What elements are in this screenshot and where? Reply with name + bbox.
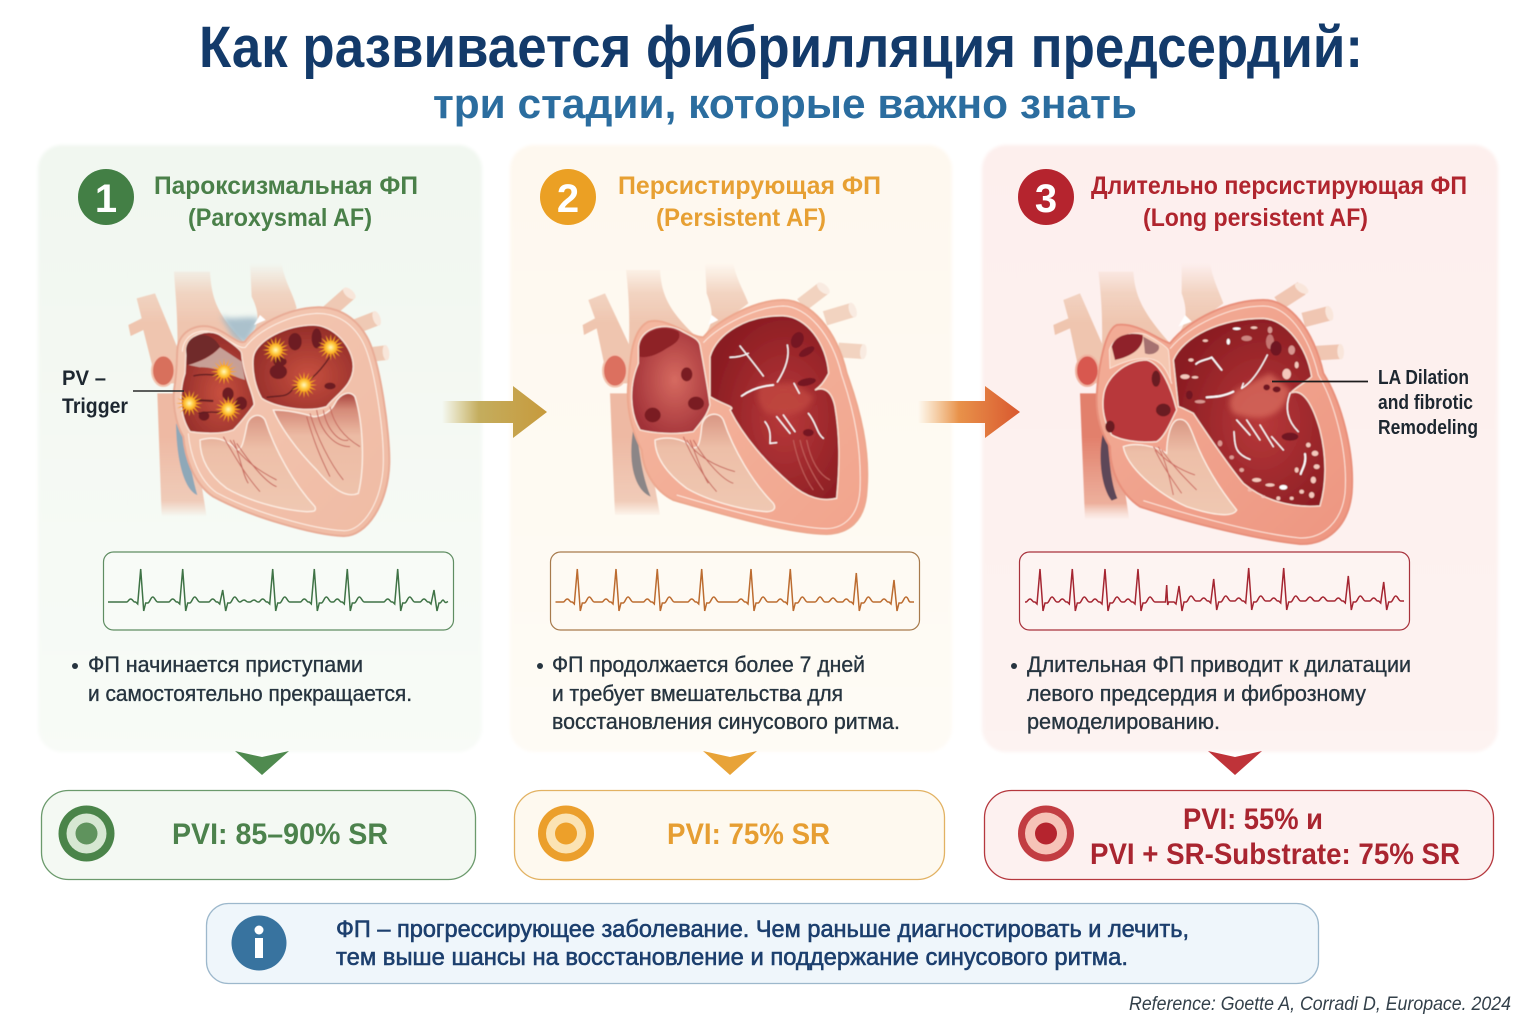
stage 3 description: Длительная ФП приводит к дилатации bbox=[1027, 652, 1411, 677]
result text: PVI: 75% SR bbox=[667, 818, 830, 851]
stage 3 heading bbox=[1091, 172, 1467, 232]
ECG strip stage 3 bbox=[1020, 552, 1410, 630]
info text bbox=[336, 916, 1189, 971]
target icon red bbox=[1018, 806, 1074, 862]
heart illustration: triggers in pulmonary veins bbox=[128, 262, 390, 536]
info text: тем выше шансы на восстановление и поддержание синусового ритма. bbox=[336, 944, 1128, 971]
stage 1 description bbox=[72, 652, 412, 706]
result box: stage 3 bbox=[984, 790, 1494, 880]
callout: LA dilation and fibrotic remodeling bbox=[1272, 367, 1478, 439]
panel background bbox=[510, 145, 952, 752]
title: Как развивается фибрилляция предсердий: bbox=[199, 15, 1363, 80]
callout: LA dilation and fibrotic remodeling: Remodeling bbox=[1378, 417, 1478, 439]
panel: stage 1 paroxysmal AF bbox=[38, 145, 482, 752]
info text: ФП – прогрессирующее заболевание. Чем раньше диагностировать и лечить, bbox=[336, 916, 1189, 943]
stage 1 heading: (Paroxysmal AF) bbox=[188, 204, 372, 232]
stage 3 heading: (Long persistent AF) bbox=[1143, 204, 1368, 232]
chevron: stage 1 bbox=[235, 751, 289, 775]
panel: stage 2 persistent AF bbox=[510, 145, 952, 752]
stage 3 heading: Длительно персистирующая ФП bbox=[1091, 172, 1467, 200]
reference: Reference: Goette A, Corradi D, Europace. 2024 bbox=[1129, 994, 1511, 1015]
stage 2 heading: (Persistent AF) bbox=[656, 204, 826, 232]
arrow: stage 1 to 2 bbox=[442, 386, 547, 438]
arrow: stage 2 to 3 bbox=[918, 386, 1020, 438]
panel background bbox=[982, 145, 1498, 752]
ECG strip stage 2 bbox=[550, 552, 920, 630]
stage 2 description: ФП продолжается более 7 дней bbox=[552, 652, 865, 677]
callout: LA dilation and fibrotic remodeling: and fibrotic bbox=[1378, 392, 1473, 414]
chevron: stage 3 bbox=[1208, 751, 1262, 775]
subtitle: три стадии, которые важно знать bbox=[433, 80, 1137, 127]
stage 2 heading bbox=[618, 172, 881, 232]
callout: PV trigger: PV – bbox=[62, 367, 106, 390]
icon: info bbox=[232, 916, 286, 970]
stage 3 description bbox=[1011, 652, 1411, 734]
stage 1 description: ФП начинается приступами bbox=[88, 652, 363, 677]
heart illustration: dilated atrium and fibrosis bbox=[1053, 262, 1352, 544]
panel background bbox=[38, 145, 482, 752]
ECG strip stage 1 bbox=[104, 552, 454, 630]
stage 2 heading: Персистирующая ФП bbox=[618, 172, 881, 200]
result box: stage 1 bbox=[42, 790, 476, 880]
stage 2 description bbox=[537, 652, 900, 734]
number badge 2: 2 bbox=[557, 177, 579, 221]
result text: PVI + SR-Substrate: 75% SR bbox=[1090, 838, 1460, 871]
callout: PV trigger: Trigger bbox=[62, 395, 128, 418]
stage 3 description: ремоделированию. bbox=[1027, 709, 1220, 734]
callout: LA dilation and fibrotic remodeling: LA Dilation bbox=[1378, 367, 1469, 389]
target icon orange bbox=[538, 806, 594, 862]
chevron: stage 2 bbox=[703, 751, 757, 775]
stage 1 description: и самостоятельно прекращается. bbox=[88, 681, 412, 706]
callout: PV trigger bbox=[62, 367, 184, 418]
result text: PVI: 85–90% SR bbox=[172, 818, 388, 851]
number badge 3 bbox=[1018, 169, 1074, 225]
panel: stage 3 long persistent AF bbox=[982, 145, 1498, 752]
info box bbox=[206, 904, 1318, 984]
number badge 3: 3 bbox=[1035, 177, 1057, 221]
result box: stage 2 bbox=[514, 790, 944, 880]
number badge 1 bbox=[78, 169, 134, 225]
target icon green bbox=[58, 806, 114, 862]
stage 1 heading bbox=[154, 172, 418, 232]
stage 3 description: левого предсердия и фиброзному bbox=[1027, 681, 1366, 706]
result text: PVI: 55% и bbox=[1183, 803, 1323, 836]
heart illustration: persistent AF bbox=[583, 262, 867, 534]
stage 2 description: и требует вмешательства для bbox=[552, 681, 843, 706]
number badge 1: 1 bbox=[95, 177, 117, 221]
result text bbox=[1090, 803, 1460, 871]
stage 2 description: восстановления синусового ритма. bbox=[552, 709, 900, 734]
stage 1 heading: Пароксизмальная ФП bbox=[154, 172, 418, 200]
number badge 2 bbox=[540, 169, 596, 225]
